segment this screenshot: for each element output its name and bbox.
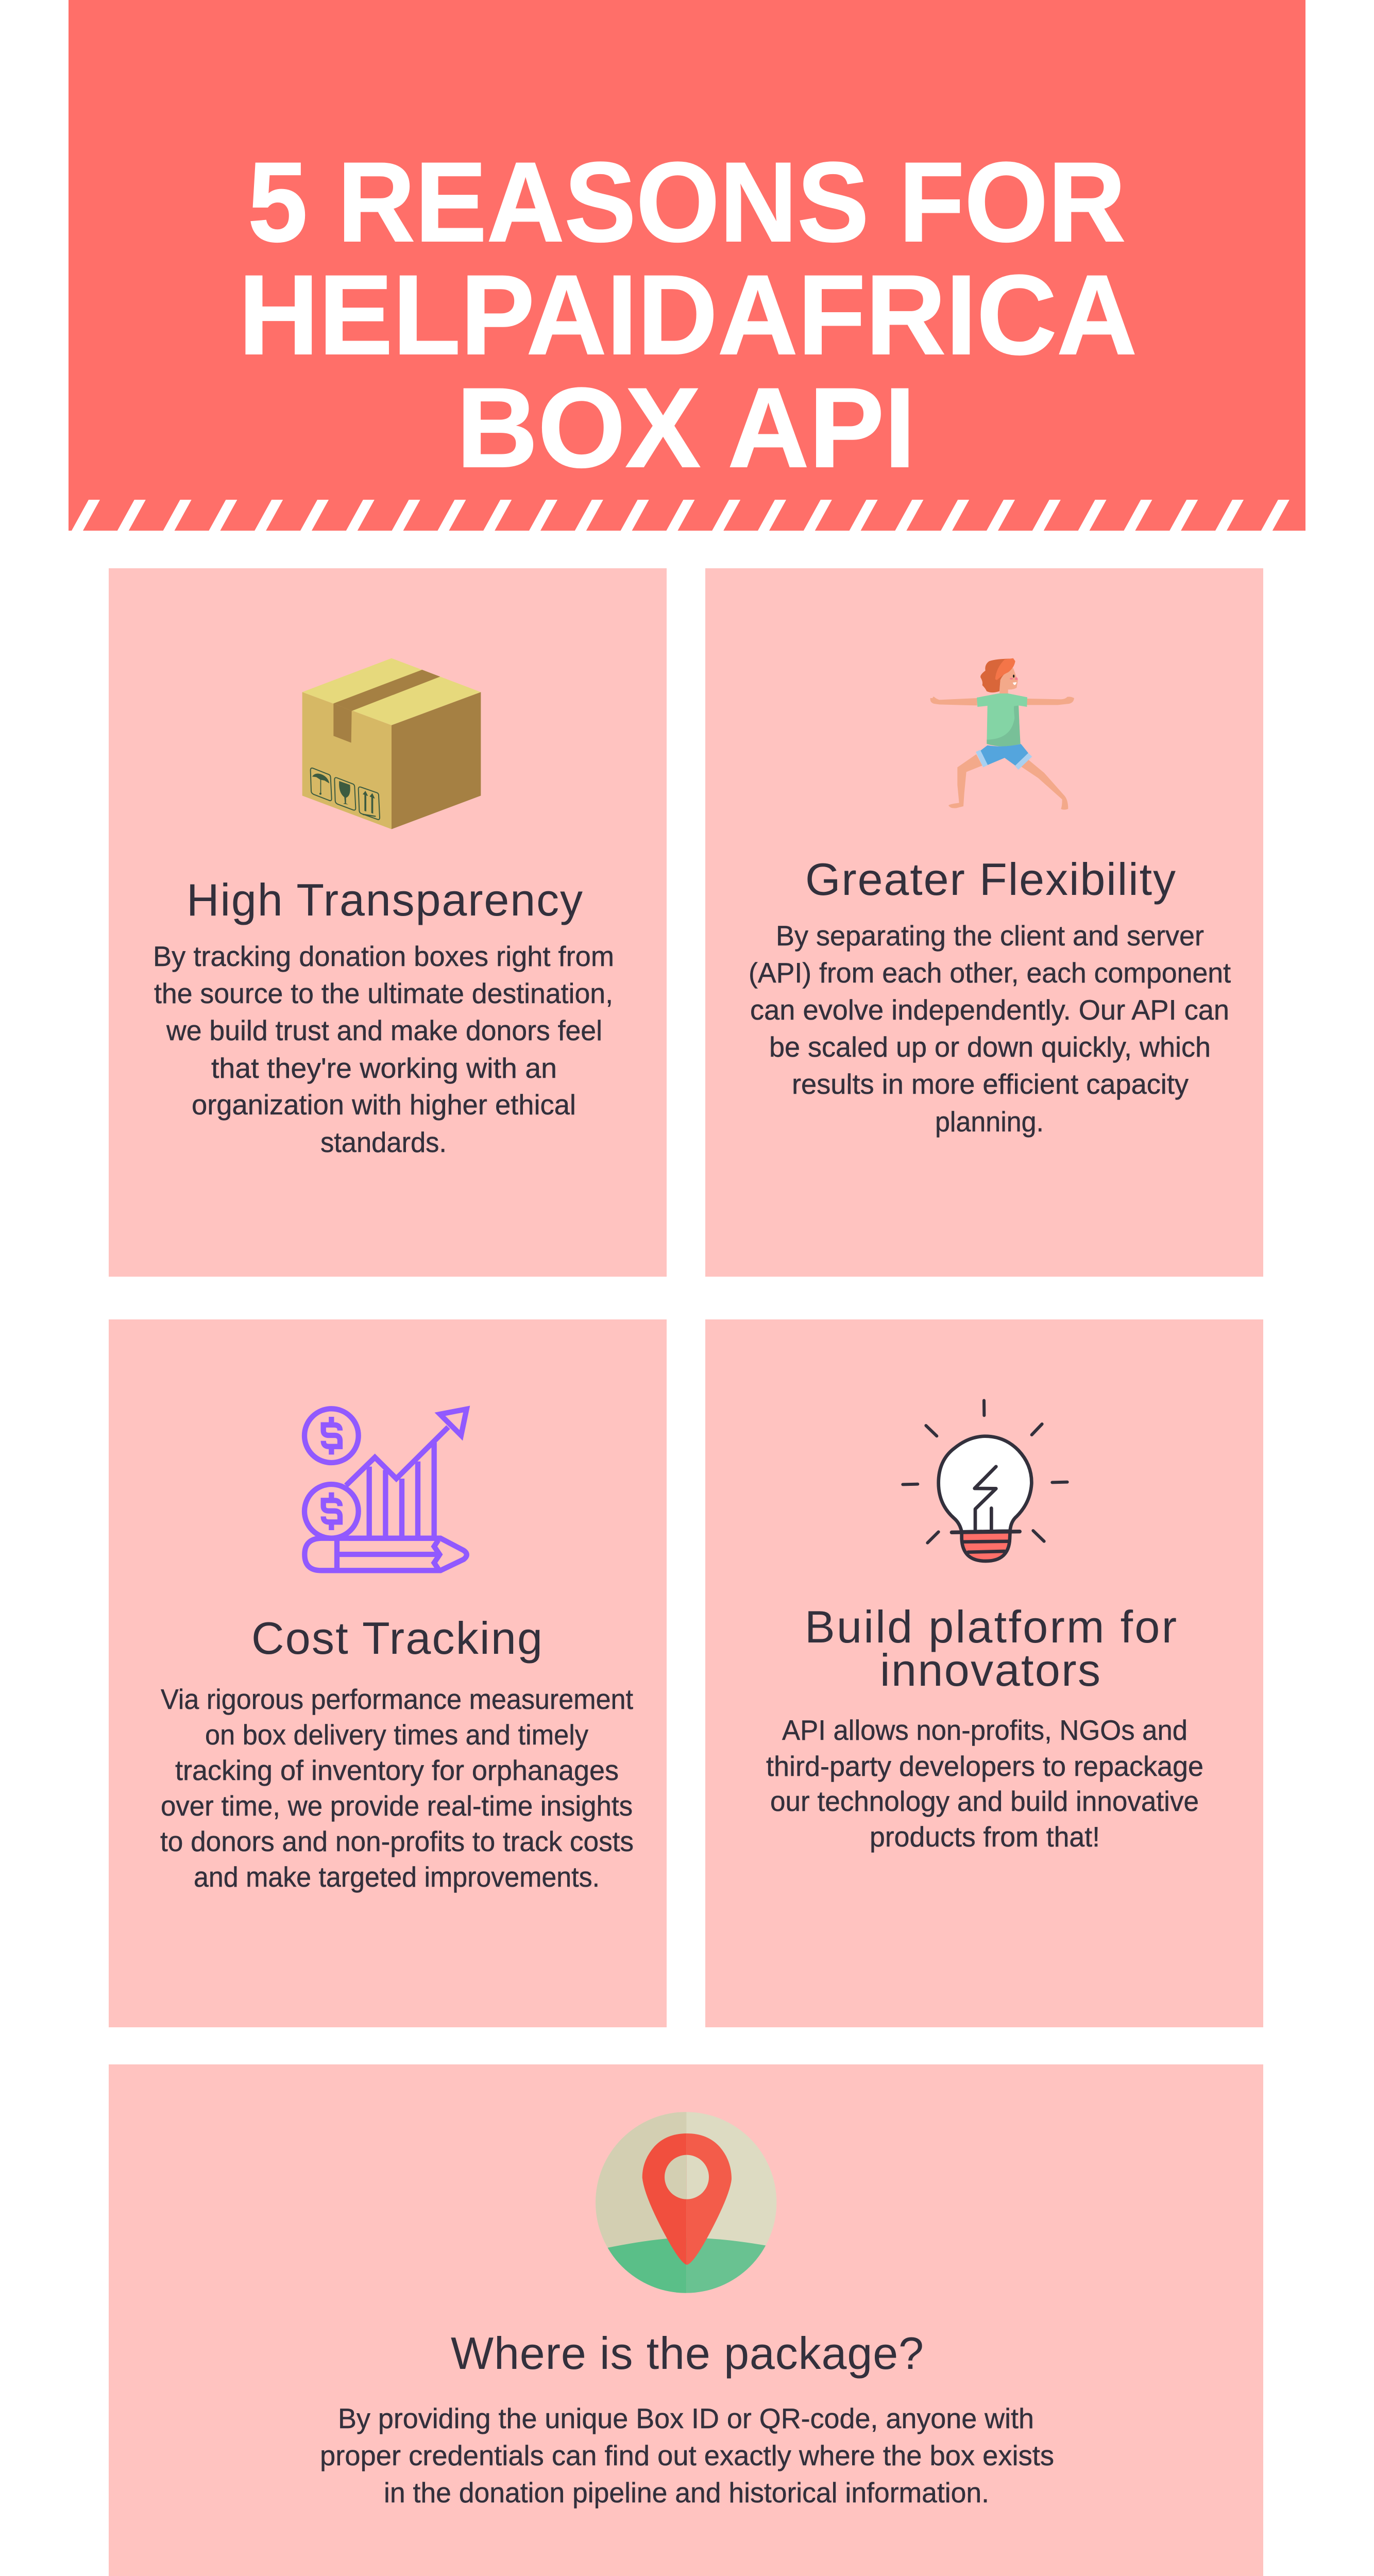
body: Greater Flexibility	[749, 920, 1231, 1138]
body: Build platform for innovators	[766, 1714, 1203, 1853]
body: Build platform for innovators: API allows non-profits, NGOs and	[782, 1714, 1188, 1746]
body: Greater Flexibility: planning.	[935, 1106, 1044, 1138]
body: Cost Tracking: and make targeted improvements.	[194, 1861, 600, 1893]
body: Greater Flexibility: By separating the client and server	[776, 920, 1204, 952]
body: High Transparency: organization with higher ethical	[192, 1089, 576, 1121]
panel: Greater Flexibility	[705, 568, 1263, 1277]
body: Cost Tracking: Via rigorous performance measurement	[161, 1683, 633, 1715]
panel: Cost Tracking	[109, 1319, 667, 2027]
title: HELPAIDAFRICA	[239, 251, 1137, 378]
body: Where is the package?: in the donation pipeline and historical information.	[384, 2477, 989, 2509]
header stripes	[72, 500, 1290, 531]
heading: High Transparency: High Transparency	[186, 874, 583, 925]
heading: Greater Flexibility: Greater Flexibility	[805, 854, 1176, 905]
body: Build platform for innovators: third-party developers to repackage	[766, 1750, 1203, 1782]
header band	[69, 0, 1305, 531]
heading: Build platform for innovators: Build platform for	[805, 1601, 1177, 1652]
title: BOX API	[456, 364, 915, 491]
panel: Where is the package?	[109, 2064, 1263, 2576]
body: High Transparency: that they're working with an	[211, 1052, 557, 1084]
heading: Build platform for innovators: innovators	[880, 1645, 1100, 1696]
body: Where is the package?: By providing the unique Box ID or QR-code, anyone with	[338, 2402, 1034, 2434]
icon: growth chart with coins and pencil	[304, 1409, 467, 1570]
body: Greater Flexibility: can evolve independently. Our API can	[750, 994, 1229, 1026]
body: Greater Flexibility: results in more efficient capacity	[792, 1068, 1189, 1100]
body: High Transparency: By tracking donation boxes right from	[153, 940, 614, 972]
body: Cost Tracking: on box delivery times and timely	[205, 1719, 588, 1751]
body: High Transparency	[153, 940, 614, 1158]
panel: High Transparency	[109, 568, 667, 1277]
body: High Transparency: the source to the ultimate destination,	[154, 977, 613, 1009]
body: Greater Flexibility: be scaled up or down quickly, which	[769, 1031, 1211, 1063]
body: Greater Flexibility: (API) from each other, each component	[749, 957, 1231, 989]
title	[239, 139, 1137, 491]
panel: Build platform for innovators	[705, 1319, 1263, 2027]
body: Where is the package?	[320, 2402, 1054, 2509]
title: 5 REASONS FOR	[248, 139, 1126, 265]
body: Cost Tracking: over time, we provide real-time insights	[161, 1790, 633, 1822]
body: High Transparency: we build trust and make donors feel	[166, 1014, 602, 1046]
icon: yoga figure	[930, 658, 1074, 810]
heading: Where is the package?: Where is the package?	[451, 2328, 924, 2379]
body: Build platform for innovators: products from that!	[870, 1821, 1100, 1853]
body: Where is the package?: proper credentials can find out exactly where the box exists	[320, 2439, 1054, 2471]
icon: cardboard box	[302, 658, 481, 829]
body: Build platform for innovators: our technology and build innovative	[770, 1785, 1199, 1817]
body: Cost Tracking	[160, 1683, 634, 1893]
icon: map pin	[596, 2112, 777, 2293]
heading: Cost Tracking: Cost Tracking	[251, 1613, 542, 1664]
body: Cost Tracking: tracking of inventory for orphanages	[175, 1754, 619, 1786]
heading: Build platform for innovators	[805, 1601, 1177, 1696]
body: Cost Tracking: to donors and non-profits to track costs	[160, 1825, 634, 1857]
body: High Transparency: standards.	[320, 1126, 447, 1158]
icon: light bulb	[903, 1400, 1067, 1561]
